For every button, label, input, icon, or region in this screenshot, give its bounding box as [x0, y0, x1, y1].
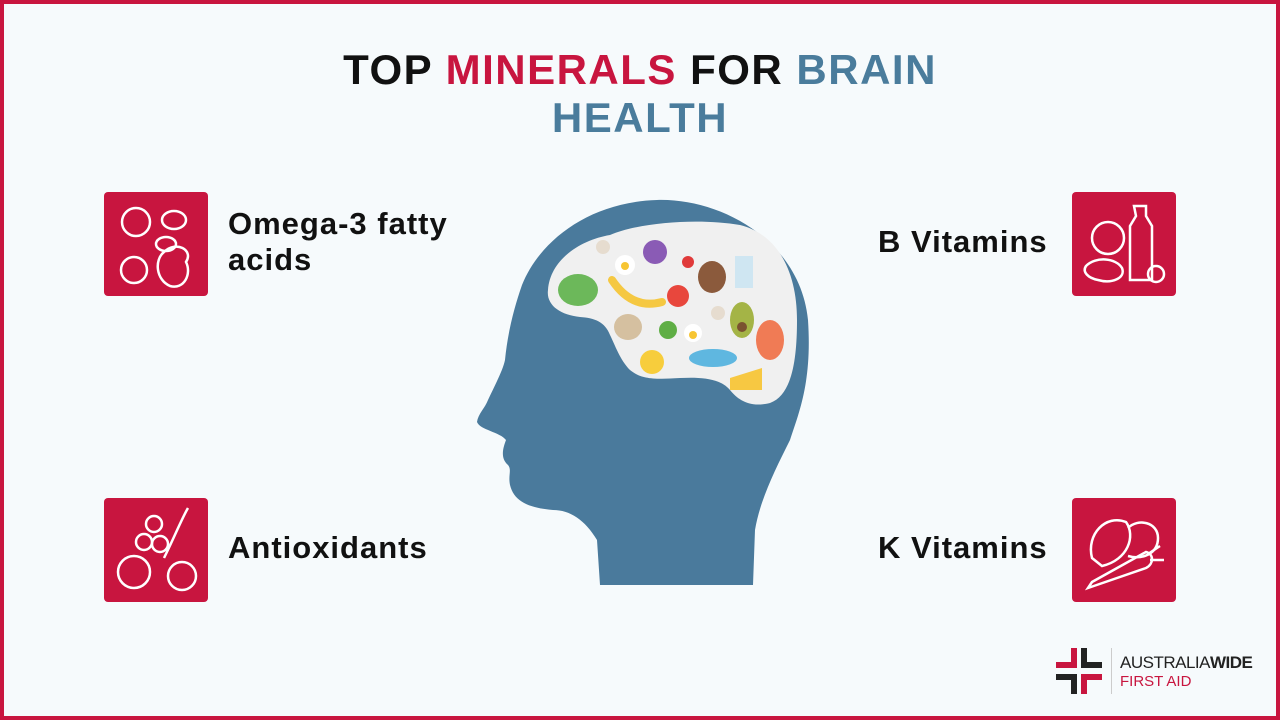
label: K vitamins: K Vitamins — [878, 530, 1048, 565]
label: B vitamins: B Vitamins — [878, 224, 1048, 259]
label: omega-3: Omega-3 fatty — [228, 206, 448, 241]
title — [343, 46, 937, 141]
label: omega-3 — [228, 206, 448, 277]
title: TOP MINERALS FOR BRAIN — [343, 46, 937, 93]
icon: leafy greens and carrot — [1072, 498, 1176, 602]
icon: nuts and seeds — [104, 192, 208, 296]
icon: fruits — [104, 498, 208, 602]
label: antioxidants: Antioxidants — [228, 530, 428, 565]
icon: meat and milk — [1072, 192, 1176, 296]
logo — [1056, 648, 1252, 694]
logo: AUSTRALIAWIDE — [1120, 653, 1252, 672]
title: HEALTH — [552, 94, 728, 141]
label: omega-3: acids — [228, 242, 312, 277]
brain with food — [548, 222, 797, 405]
logo: FIRST AID — [1120, 673, 1191, 690]
